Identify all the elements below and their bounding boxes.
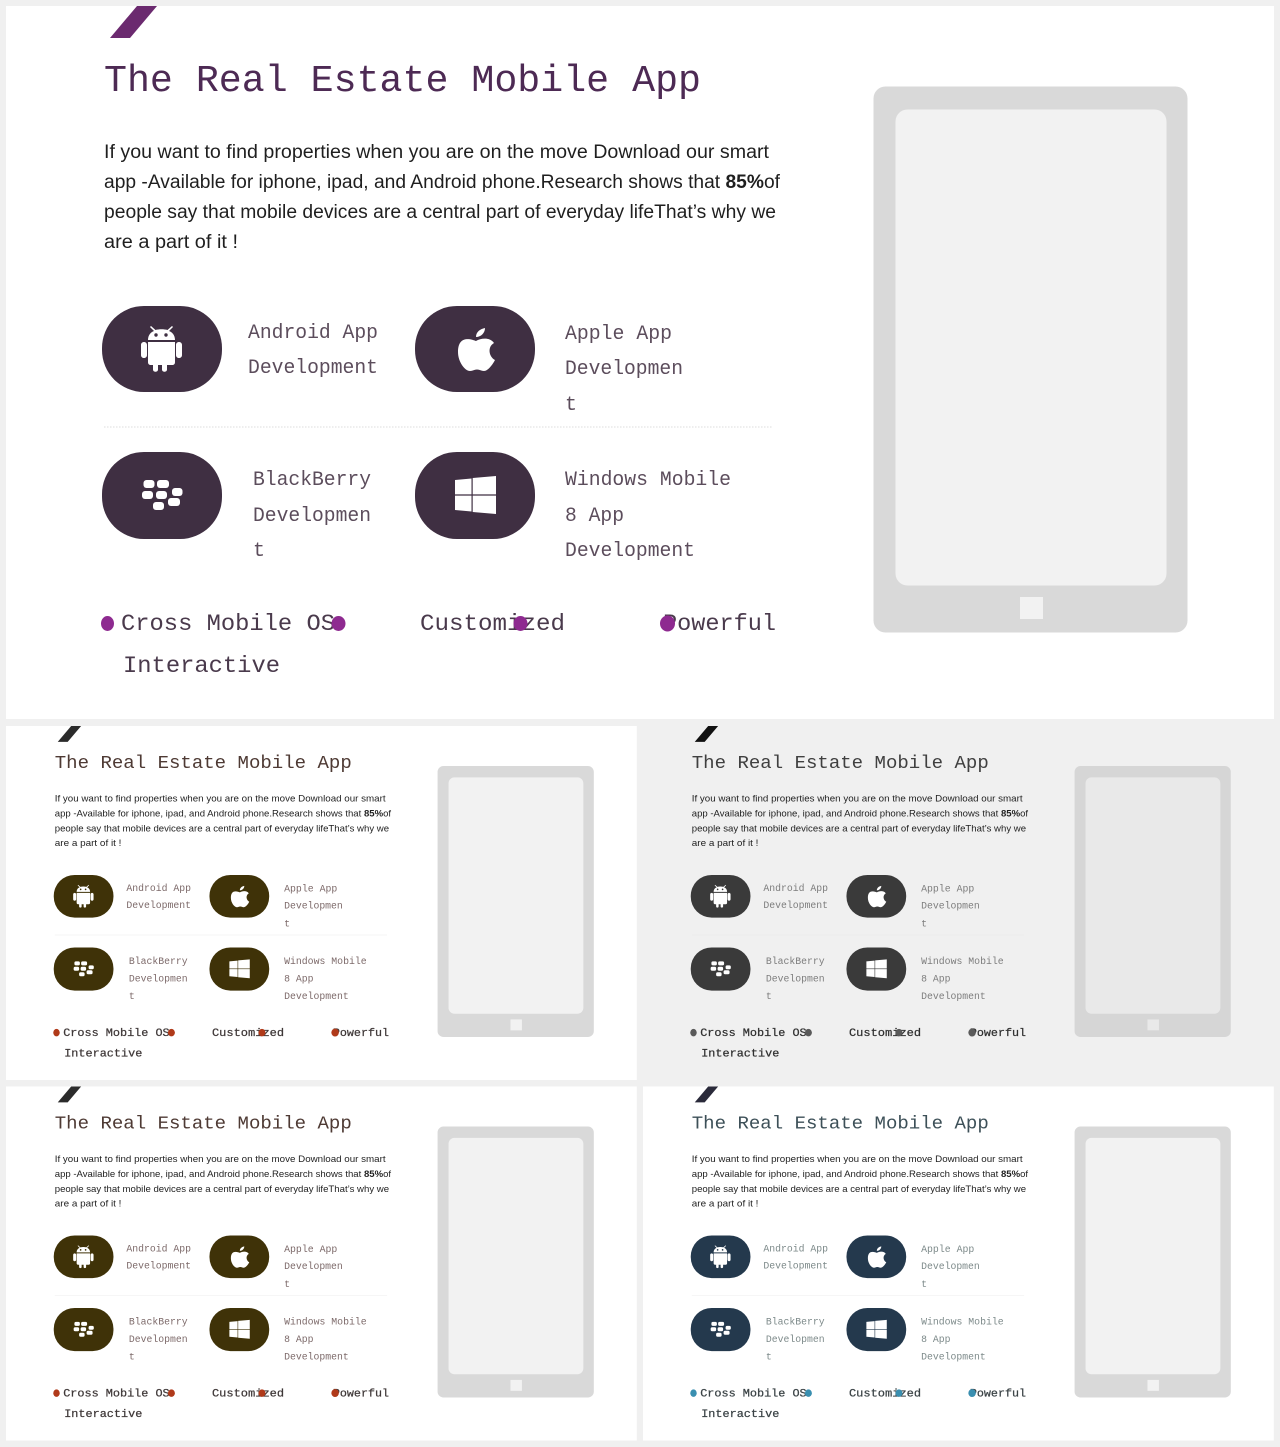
feature list: Interactive xyxy=(64,1408,142,1421)
label: blackberry xyxy=(129,1316,188,1363)
label: apple xyxy=(284,883,343,930)
label: apple: Developmen xyxy=(565,358,683,381)
label: windows: 8 App xyxy=(565,505,624,528)
label: windows xyxy=(284,1316,367,1363)
label: apple xyxy=(284,1244,343,1290)
label: android xyxy=(763,883,828,911)
label: windows: Development xyxy=(284,991,349,1002)
text block: intro paragraph: If you want to find properties when you are on the move Download our smart xyxy=(55,793,386,804)
feature list: Interactive xyxy=(701,1048,779,1061)
icon: accent slash xyxy=(58,1086,81,1102)
feature list: Powerful xyxy=(663,611,776,637)
feature list: Cross Mobile OS xyxy=(63,1387,170,1400)
label: blackberry: t xyxy=(766,1352,772,1363)
icon: windows xyxy=(209,947,269,991)
label: windows: 8 App xyxy=(284,974,313,985)
label: windows: Windows Mobile xyxy=(921,956,1004,967)
feature list xyxy=(53,1387,389,1421)
label: android: Development xyxy=(126,900,191,911)
feature list xyxy=(53,1027,389,1061)
phone mockup xyxy=(1075,1126,1231,1398)
label: apple: t xyxy=(921,1279,927,1290)
icon: apple xyxy=(209,1235,269,1278)
icon: windows xyxy=(415,452,535,539)
icon: android xyxy=(54,875,113,918)
label: android: Android App xyxy=(763,883,828,894)
title: The Real Estate Mobile App xyxy=(104,60,701,103)
label: blackberry xyxy=(253,469,371,563)
icon: android xyxy=(691,1235,750,1278)
feature list xyxy=(101,611,776,679)
label: windows xyxy=(565,469,731,563)
text block: intro paragraph: people say that mobile devices are a central part of everyday lifeThat’s why we xyxy=(55,823,389,834)
feature list: Customized xyxy=(849,1387,921,1400)
label: blackberry: BlackBerry xyxy=(129,956,188,967)
icon: windows xyxy=(209,1308,269,1351)
text block: intro paragraph: If you want to find properties when you are on the move Download our smart xyxy=(104,142,770,163)
label: android: Android App xyxy=(248,322,378,345)
text block: intro paragraph: app -Available for iphone, ipad, and Android phone.Research shows that 85%of xyxy=(104,172,781,193)
label: apple xyxy=(565,323,683,417)
text block: intro paragraph: people say that mobile devices are a central part of everyday lifeThat’s why we xyxy=(692,1184,1026,1195)
label: apple: t xyxy=(921,919,927,930)
label: blackberry: Developmen xyxy=(253,505,371,528)
icon: apple xyxy=(846,1235,906,1278)
label: windows: Development xyxy=(921,1352,986,1363)
feature list: Powerful xyxy=(970,1387,1026,1400)
text block: intro paragraph: people say that mobile devices are a central part of everyday lifeThat’s why we xyxy=(104,202,776,223)
text block: intro paragraph: are a part of it ! xyxy=(104,232,238,253)
label: apple: Developmen xyxy=(921,1261,980,1272)
label: apple xyxy=(921,883,980,930)
title: The Real Estate Mobile App xyxy=(55,1113,352,1135)
label: apple: t xyxy=(284,1279,290,1290)
icon: accent slash xyxy=(695,726,718,742)
text block: intro paragraph: If you want to find properties when you are on the move Download our smart xyxy=(692,1154,1023,1165)
feature list: Cross Mobile OS xyxy=(121,611,335,637)
label: windows xyxy=(284,956,367,1002)
panel: brown slide, top left xyxy=(6,726,637,1080)
icon: android xyxy=(691,875,750,918)
icon: windows xyxy=(846,1308,906,1351)
label: blackberry: BlackBerry xyxy=(766,1316,825,1327)
text block: intro paragraph: app -Available for iphone, ipad, and Android phone.Research shows that 85%of xyxy=(692,1169,1028,1180)
label: android: Android App xyxy=(126,1243,191,1254)
icon: blackberry xyxy=(54,1308,113,1351)
label: android: Development xyxy=(763,900,828,911)
phone mockup xyxy=(874,86,1188,632)
label: android: Development xyxy=(126,1261,191,1272)
panel: grey slide, top right xyxy=(643,726,1274,1080)
title: The Real Estate Mobile App xyxy=(692,752,989,774)
feature list: Customized xyxy=(212,1027,284,1040)
label: apple: Developmen xyxy=(284,901,343,912)
icon: blackberry xyxy=(691,947,750,991)
label: apple: Developmen xyxy=(284,1261,343,1272)
label: blackberry: t xyxy=(766,991,772,1002)
icon: accent slash xyxy=(58,726,81,742)
text block: intro paragraph: people say that mobile devices are a central part of everyday lifeThat’s why we xyxy=(55,1184,389,1195)
panel: brown slide, bottom left xyxy=(6,1086,637,1441)
label: blackberry xyxy=(766,1316,825,1363)
text block: intro paragraph: are a part of it ! xyxy=(692,838,758,849)
text block: intro paragraph xyxy=(692,793,1028,849)
phone mockup xyxy=(438,1126,594,1398)
feature list: Powerful xyxy=(970,1027,1026,1040)
feature list xyxy=(690,1387,1026,1421)
label: android: Android App xyxy=(126,883,191,894)
icon: apple xyxy=(209,875,269,918)
icon: blackberry xyxy=(54,947,113,991)
label: android xyxy=(763,1243,828,1272)
title: The Real Estate Mobile App xyxy=(55,752,352,774)
label: blackberry xyxy=(129,956,188,1002)
label: blackberry: t xyxy=(129,991,135,1002)
label: windows: 8 App xyxy=(284,1334,313,1345)
label: windows: Development xyxy=(921,991,986,1002)
text block: intro paragraph xyxy=(55,1154,391,1210)
label: windows: 8 App xyxy=(921,974,950,985)
icon: android xyxy=(102,306,222,392)
label: android xyxy=(126,883,191,911)
label: windows: Windows Mobile xyxy=(921,1316,1004,1327)
label: windows: Development xyxy=(565,540,695,563)
feature list: Interactive xyxy=(64,1048,142,1061)
title: The Real Estate Mobile App xyxy=(692,1113,989,1135)
icon: android xyxy=(54,1235,113,1278)
icon: accent slash xyxy=(110,6,157,38)
label: apple: Developmen xyxy=(921,901,980,912)
text block: intro paragraph: are a part of it ! xyxy=(692,1199,758,1210)
label: windows xyxy=(921,956,1004,1002)
label: windows: Windows Mobile xyxy=(284,1316,367,1327)
text block: intro paragraph: are a part of it ! xyxy=(55,838,121,849)
label: apple: t xyxy=(565,394,577,417)
phone mockup xyxy=(438,766,594,1037)
label: android: Android App xyxy=(763,1243,828,1254)
text block: intro paragraph: app -Available for iphone, ipad, and Android phone.Research shows that 85%of xyxy=(692,808,1028,819)
phone mockup xyxy=(1075,766,1231,1037)
icon: blackberry xyxy=(691,1308,750,1351)
icon: accent slash xyxy=(695,1086,718,1102)
feature list: Customized xyxy=(420,611,565,637)
text block: intro paragraph: app -Available for iphone, ipad, and Android phone.Research shows that 85%of xyxy=(55,1169,391,1180)
label: blackberry: t xyxy=(253,540,265,563)
label: apple: Apple App xyxy=(921,1244,974,1255)
feature list: Interactive xyxy=(701,1408,779,1421)
text block: intro paragraph: are a part of it ! xyxy=(55,1199,121,1210)
text block: intro paragraph: If you want to find properties when you are on the move Download our smart xyxy=(55,1154,386,1165)
label: blackberry: BlackBerry xyxy=(129,1316,188,1327)
label: blackberry xyxy=(766,956,825,1002)
label: blackberry: BlackBerry xyxy=(253,469,371,492)
label: windows: Windows Mobile xyxy=(565,469,731,492)
feature list: Cross Mobile OS xyxy=(700,1027,807,1040)
label: blackberry: t xyxy=(129,1352,135,1363)
text block: intro paragraph: If you want to find properties when you are on the move Download our smart xyxy=(692,793,1023,804)
feature list: Cross Mobile OS xyxy=(63,1027,170,1040)
label: android xyxy=(248,322,378,380)
icon: blackberry xyxy=(102,452,222,539)
label: apple: Apple App xyxy=(565,323,672,346)
feature list xyxy=(690,1027,1026,1061)
label: apple xyxy=(921,1244,980,1290)
text block: intro paragraph xyxy=(104,142,781,253)
icon: apple xyxy=(415,306,535,392)
text block: intro paragraph xyxy=(692,1154,1028,1210)
label: apple: Apple App xyxy=(921,883,974,894)
label: apple: Apple App xyxy=(284,883,337,894)
text block: intro paragraph: people say that mobile devices are a central part of everyday lifeThat’s why we xyxy=(692,823,1026,834)
label: windows: 8 App xyxy=(921,1334,950,1345)
label: android: Development xyxy=(763,1261,828,1272)
icon: windows xyxy=(846,947,906,991)
feature list: Powerful xyxy=(333,1387,389,1400)
feature list: Customized xyxy=(849,1027,921,1040)
panel: main purple slide xyxy=(6,6,1274,719)
label: blackberry: Developmen xyxy=(129,974,188,985)
label: apple: t xyxy=(284,919,290,930)
feature list: Interactive xyxy=(123,653,280,679)
text block: intro paragraph: app -Available for iphone, ipad, and Android phone.Research shows that 85%of xyxy=(55,808,391,819)
label: apple: Apple App xyxy=(284,1244,337,1255)
feature list: Powerful xyxy=(333,1027,389,1040)
panel: navy slide, bottom right xyxy=(643,1086,1274,1441)
label: blackberry: Developmen xyxy=(766,974,825,985)
label: blackberry: Developmen xyxy=(766,1334,825,1345)
label: windows: Development xyxy=(284,1352,349,1363)
label: android: Development xyxy=(248,357,378,380)
label: android xyxy=(126,1243,191,1272)
label: blackberry: Developmen xyxy=(129,1334,188,1345)
label: blackberry: BlackBerry xyxy=(766,956,825,967)
label: windows xyxy=(921,1316,1004,1363)
label: windows: Windows Mobile xyxy=(284,956,367,967)
text block: intro paragraph xyxy=(55,793,391,849)
feature list: Customized xyxy=(212,1387,284,1400)
icon: apple xyxy=(846,875,906,918)
feature list: Cross Mobile OS xyxy=(700,1387,807,1400)
